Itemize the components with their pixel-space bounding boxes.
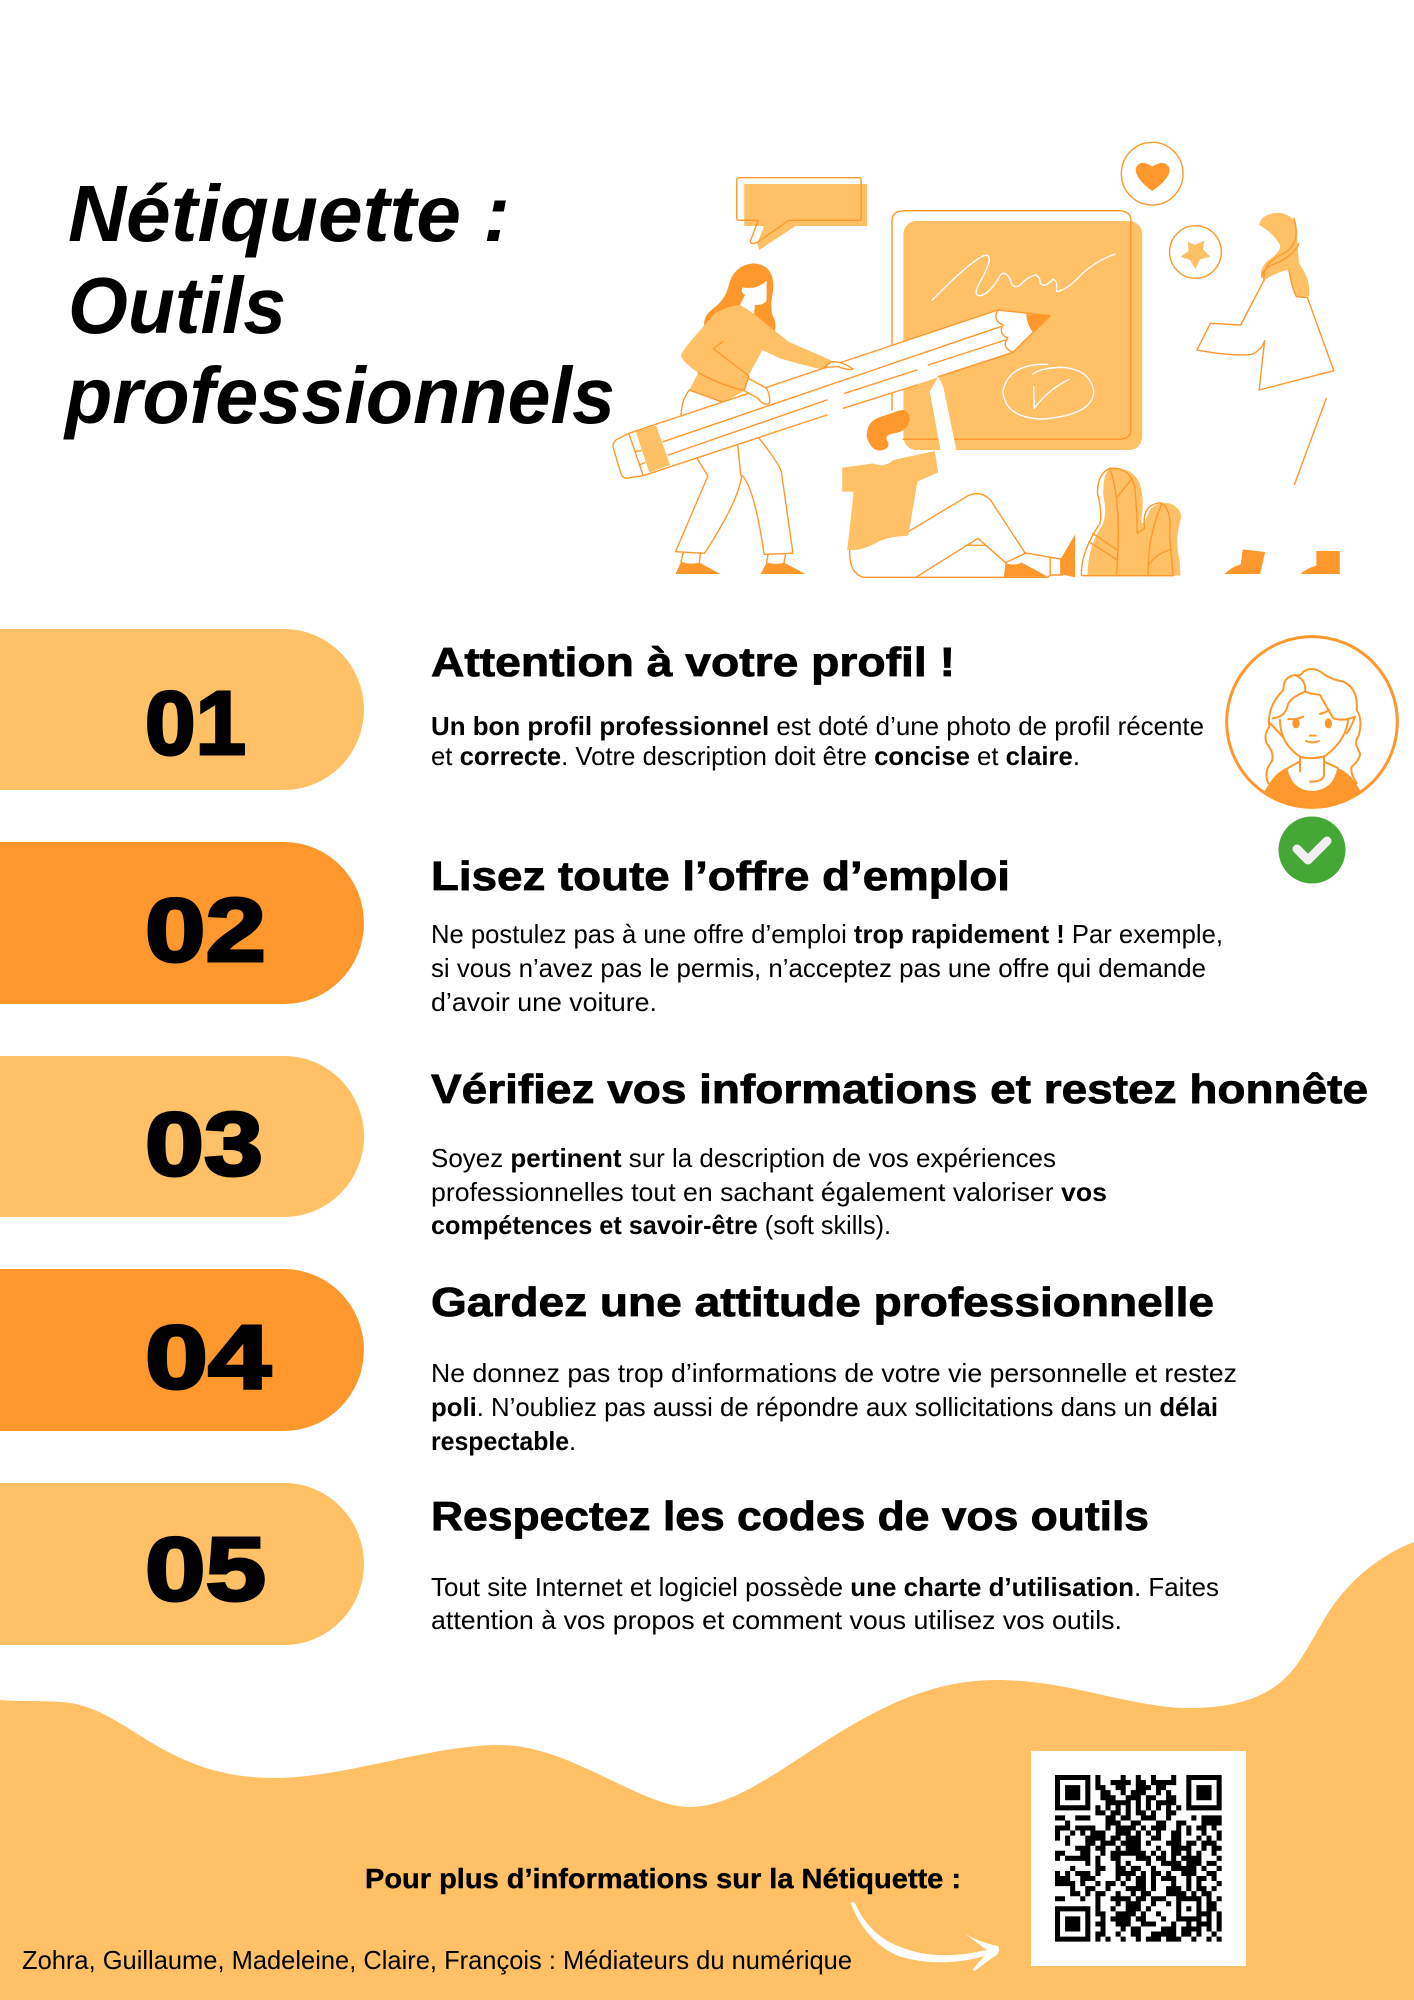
step 4 text bbox=[431, 1358, 1237, 1456]
step 1 heading: Attention à votre profil ! bbox=[431, 639, 955, 685]
credits: Zohra, Guillaume, Madeleine, Claire, François : Médiateurs du numérique bbox=[22, 1945, 852, 1975]
step 2 text: d’avoir une voiture. bbox=[431, 987, 657, 1017]
step 2 badge: 02 bbox=[145, 881, 266, 981]
step 5 text: attention à vos propos et comment vous utilisez vos outils. bbox=[431, 1605, 1122, 1635]
figure: woman holding pencil bbox=[676, 263, 832, 574]
step 4 text: respectable. bbox=[431, 1426, 576, 1456]
icon: speech bubble bbox=[737, 178, 867, 250]
footer wave background bbox=[0, 1542, 1414, 2000]
QR code bbox=[1031, 1751, 1246, 1966]
icon: giant pencil bbox=[613, 310, 1050, 478]
step 3 text: Soyez pertinent sur la description de vos expériences bbox=[431, 1143, 1056, 1173]
step 4 text: Ne donnez pas trop d’informations de votre vie personnelle et restez bbox=[431, 1358, 1237, 1388]
step 2 text: Ne postulez pas à une offre d’emploi trop rapidement ! Par exemple, bbox=[431, 919, 1223, 949]
icon: heart badge bbox=[1121, 142, 1183, 205]
title: Outils bbox=[68, 261, 286, 350]
step 3 badge bbox=[0, 1056, 364, 1217]
step 3 text bbox=[431, 1143, 1107, 1240]
arrow to QR code bbox=[851, 1902, 999, 1971]
step 1 badge bbox=[0, 629, 364, 790]
figure: woman with hijab bbox=[1197, 213, 1340, 574]
title: professionnels bbox=[63, 351, 615, 440]
step 1 text: et correcte. Votre description doit être concise et claire. bbox=[431, 741, 1080, 771]
step 5 text: Tout site Internet et logiciel possède une charte d’utilisation. Faites bbox=[431, 1572, 1219, 1602]
icon: green check badge bbox=[1278, 816, 1346, 884]
step 2 text: si vous n’avez pas le permis, n’acceptez pas une offre qui demande bbox=[431, 953, 1206, 983]
step 4 text: poli. N’oubliez pas aussi de répondre aux sollicitations dans un délai bbox=[431, 1392, 1218, 1422]
step 2 text bbox=[431, 919, 1223, 1017]
step 1 text: Un bon profil professionnel est doté d’une photo de profil récente bbox=[431, 711, 1204, 741]
illustration: team with giant pencil and signed tablet bbox=[613, 142, 1340, 577]
step 5 heading: Respectez les codes de vos outils bbox=[431, 1493, 1149, 1539]
step 4 heading: Gardez une attitude professionnelle bbox=[431, 1279, 1214, 1325]
step 4 badge: 04 bbox=[145, 1308, 271, 1408]
step 3 text: professionnelles tout en sachant également valoriser vos bbox=[431, 1177, 1107, 1207]
icon: star badge bbox=[1170, 226, 1221, 278]
step 1 badge: 01 bbox=[145, 674, 246, 774]
step 2 heading: Lisez toute l’offre d’emploi bbox=[431, 853, 1010, 899]
step 5 text bbox=[431, 1572, 1219, 1635]
step 3 badge: 03 bbox=[145, 1095, 263, 1195]
title bbox=[63, 169, 615, 440]
step 5 badge: 05 bbox=[145, 1520, 266, 1620]
icon: profile portrait in circle bbox=[1227, 637, 1397, 807]
step 3 text: compétences et savoir-être (soft skills). bbox=[431, 1210, 891, 1240]
icon: tablet with signature bbox=[892, 211, 1142, 450]
figure: plant bbox=[1081, 468, 1181, 576]
figure: seated man bbox=[842, 377, 1075, 577]
step 1 text bbox=[431, 711, 1204, 771]
step 3 heading: Vérifiez vos informations et restez honnête bbox=[431, 1066, 1368, 1112]
step 5 badge bbox=[0, 1483, 364, 1645]
step 4 badge bbox=[0, 1269, 364, 1431]
title: Nétiquette : bbox=[68, 169, 510, 258]
call to action text: Pour plus d’informations sur la Nétiquette : bbox=[365, 1863, 961, 1894]
step 2 badge bbox=[0, 842, 364, 1004]
